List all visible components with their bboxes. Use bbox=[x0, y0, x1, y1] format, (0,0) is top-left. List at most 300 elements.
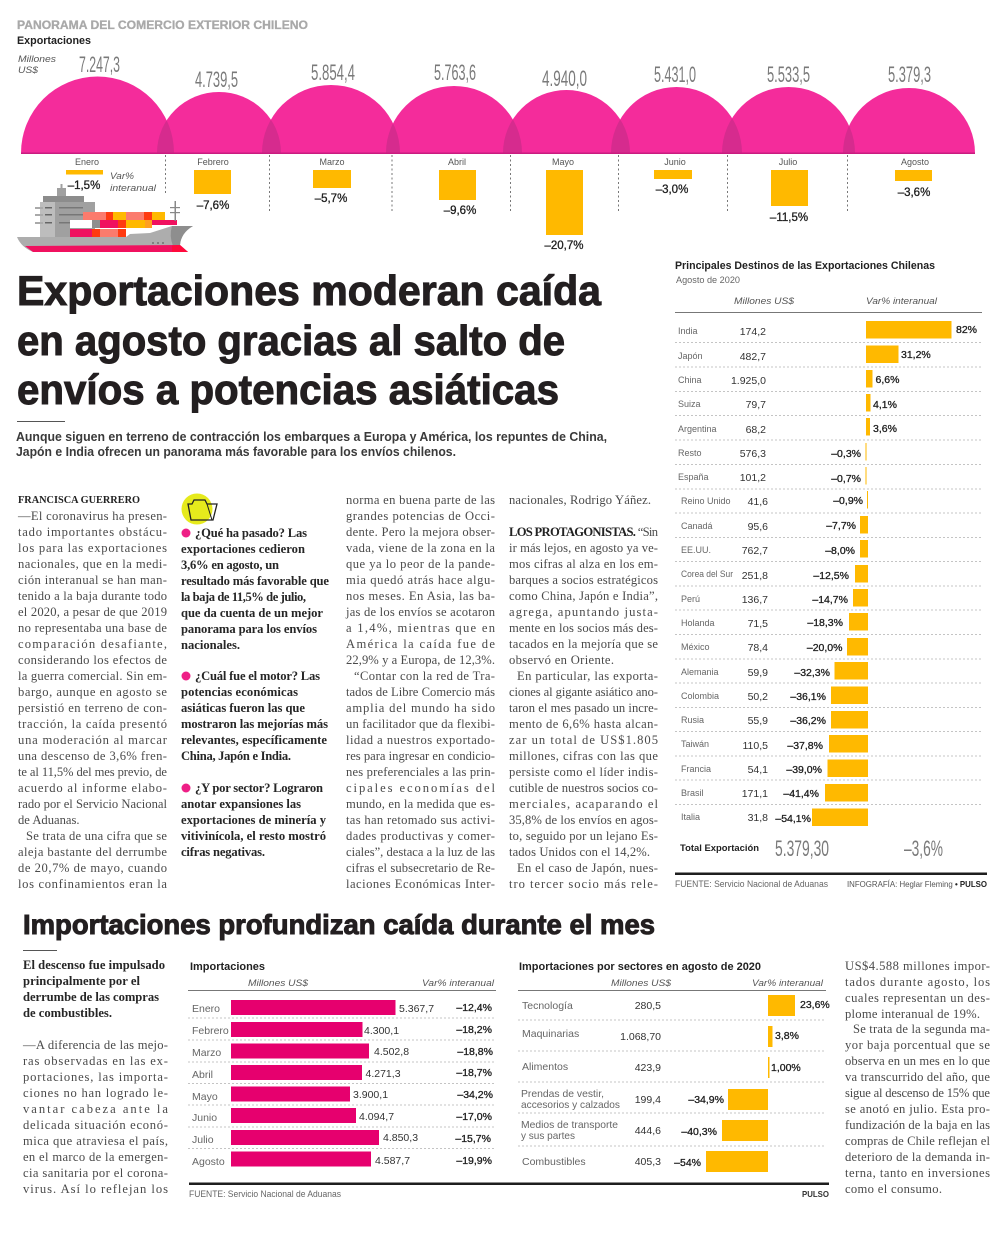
row: India bbox=[678, 321, 977, 338]
month: enero bbox=[66, 157, 103, 192]
row: Marzo: 4.502,8 bbox=[374, 1046, 409, 1058]
row: Julio: –15,7% bbox=[455, 1133, 491, 1145]
row: Alemania: Alemania bbox=[681, 667, 719, 677]
row: Alimentos: Alimentos bbox=[522, 1061, 568, 1073]
row: España: España bbox=[678, 472, 709, 482]
article column 1: una moderación al marcar bbox=[18, 733, 168, 747]
month: julio: Julio bbox=[779, 157, 797, 167]
row: Canadá bbox=[681, 516, 868, 534]
column headers bbox=[248, 978, 495, 989]
row: Julio: 4.850,3 bbox=[383, 1132, 418, 1144]
row: México: 78,4 bbox=[748, 642, 768, 654]
article: importaciones right: yor baja porcentual que se bbox=[845, 1038, 990, 1052]
article column 1: aleja bastante del derrumbe bbox=[18, 845, 167, 859]
dome values: 5.854,4 bbox=[311, 60, 355, 85]
row: Corea del Sur: –12,5% bbox=[813, 570, 849, 582]
row: Enero: –12,4% bbox=[456, 1002, 492, 1014]
row: Medios de transporte: Medios de transporte bbox=[521, 1119, 618, 1131]
article column 3: tas han retomado sus activi- bbox=[346, 813, 495, 827]
row: Maquinarias: 1.068,70 bbox=[620, 1031, 661, 1043]
article column 1: Se trata de una cifra que se bbox=[26, 829, 167, 843]
row: Japón: 31,2% bbox=[901, 349, 931, 361]
row: Italia bbox=[681, 808, 868, 826]
row: Colombia: Colombia bbox=[681, 691, 719, 701]
article column 1: te al 11,5% del mes previo, de bbox=[18, 765, 167, 779]
row: Maquinarias: 3,8% bbox=[775, 1030, 799, 1042]
article column 1: el 2020, a pesar de que 2019 bbox=[18, 605, 167, 619]
pulso credit: PULSO bbox=[802, 1189, 829, 1199]
row: Reino Unido: –0,9% bbox=[833, 495, 863, 507]
article column 1: tado importantes obstácu- bbox=[18, 525, 167, 539]
article: importaciones right: cuales representan un des- bbox=[845, 991, 990, 1005]
row: Medios de transporte: –40,3% bbox=[681, 1126, 717, 1138]
row: Tecnología: 280,5 bbox=[635, 1000, 661, 1012]
article column 4: En el caso de Japón, nues- bbox=[517, 861, 658, 875]
row: Febrero bbox=[192, 1022, 492, 1037]
article column 4: mente en los socios más des- bbox=[509, 621, 658, 635]
row: Medios de transporte: y sus partes bbox=[521, 1130, 575, 1142]
row: Prendas: 199,4 bbox=[635, 1094, 661, 1106]
infographic credit: INFOGRAFÍA: Heglar Fleming • PULSO bbox=[847, 879, 987, 889]
row: Colombia bbox=[681, 686, 868, 704]
row: Canadá: Canadá bbox=[681, 521, 713, 531]
row: España bbox=[678, 467, 866, 485]
question: y por sector: vitivinícola, el resto mostró bbox=[181, 829, 326, 843]
total row bbox=[680, 836, 943, 861]
row: Resto: Resto bbox=[678, 448, 702, 458]
row: Junio: 4.094,7 bbox=[359, 1111, 394, 1123]
dome shapes bbox=[21, 76, 975, 153]
article column 1: tenido a la baja durante todo bbox=[18, 589, 167, 603]
article: importaciones right: US$4.588 millones impor- bbox=[845, 959, 990, 973]
row: Reino Unido: 41,6 bbox=[748, 496, 768, 508]
row: Reino Unido: Reino Unido bbox=[681, 496, 731, 506]
dome chart: monthly exports bbox=[21, 52, 975, 154]
article column 3: 22,9% y a Europa, de 12,3%. bbox=[346, 653, 495, 667]
article: importaciones right bbox=[845, 959, 990, 1196]
row: Francia bbox=[681, 760, 868, 777]
row: China: China bbox=[678, 375, 702, 385]
article column 3: a 1,4%, mientras que en bbox=[346, 621, 496, 635]
row: EE.UU.: 762,7 bbox=[742, 545, 768, 557]
article column 1: nacionales, que en la medi- bbox=[18, 557, 167, 571]
row: México: México bbox=[681, 642, 710, 652]
section kicker: panorama del comercio exterior: PANORAMA DEL COMERCIO EXTERIOR CHILENO bbox=[17, 18, 308, 32]
main headline: Exportaciones moderan caída bbox=[17, 267, 602, 314]
month: julio: –11,5% bbox=[770, 212, 808, 224]
row: Japón: 482,7 bbox=[740, 351, 766, 363]
row: Reino Unido bbox=[681, 491, 868, 508]
article column 3: amplia del mundo ha sido bbox=[346, 701, 495, 715]
article column 3: laciones Económicas Inter- bbox=[346, 877, 495, 891]
article: importaciones right: como el consumo. bbox=[845, 1182, 942, 1196]
month: febrero bbox=[194, 157, 231, 212]
row: Maquinarias bbox=[522, 1026, 799, 1047]
month: febrero: –7,6% bbox=[197, 200, 229, 212]
row: Suiza: 4,1% bbox=[873, 399, 897, 411]
sidebar: key questions bbox=[181, 526, 329, 859]
article column 3: res para ingresar en condicio- bbox=[346, 749, 495, 763]
panel: principales destinos bbox=[675, 260, 987, 889]
article column 4: merciales, acaparando el bbox=[509, 797, 658, 811]
article column 4: to, seguido por un lejano Es- bbox=[509, 829, 658, 843]
month: mayo bbox=[544, 157, 584, 252]
month: marzo: –5,7% bbox=[315, 193, 347, 205]
row: Combustibles: Combustibles bbox=[522, 1156, 586, 1168]
article column 1: acuerdo al informe elabo- bbox=[18, 781, 167, 795]
dome values: 7.247,3 bbox=[79, 52, 120, 77]
article column 4: mos cifras al alza en los em- bbox=[509, 557, 658, 571]
row: Agosto: 4.587,7 bbox=[375, 1155, 410, 1167]
row: Febrero: –18,2% bbox=[456, 1024, 492, 1036]
month: enero: –1,5% bbox=[68, 180, 100, 192]
chart: monthly year-on-year change bbox=[66, 157, 932, 252]
month: julio bbox=[770, 157, 808, 224]
article column 1: una descenso de 3,6% fren- bbox=[18, 749, 167, 763]
question: cuál fue el motor: relevantes, específicamente bbox=[181, 733, 327, 747]
article: importaciones right: va transcurrido del año, que bbox=[845, 1070, 990, 1084]
question: y por sector: ¿Y por sector? Lograron bbox=[195, 781, 323, 795]
month dividers bbox=[166, 155, 848, 212]
row: Alimentos: 1,00% bbox=[771, 1062, 801, 1074]
row: Suiza: Suiza bbox=[678, 399, 701, 409]
row: India: 174,2 bbox=[740, 326, 766, 338]
question: qué ha pasado: panorama para los envíos bbox=[181, 622, 317, 636]
article: importaciones right: sigue al descenso de 15% que bbox=[845, 1086, 990, 1100]
article column 4: agrega, apuntando justa- bbox=[509, 605, 658, 619]
row: Taiwán: –37,8% bbox=[787, 740, 823, 752]
icon: folder on yellow circle bbox=[182, 494, 217, 524]
question: y por sector: anotar expansiones las bbox=[181, 797, 301, 811]
question: qué ha pasado: la baja de 11,5% de julio, bbox=[181, 590, 306, 604]
article column 1: FRANCISCA GUERRERO bbox=[18, 495, 140, 506]
row: Alimentos: 423,9 bbox=[635, 1062, 661, 1074]
row: Brasil: 171,1 bbox=[742, 788, 768, 800]
article column 1: considerando los efectos de bbox=[18, 653, 167, 667]
row: Febrero: Febrero bbox=[192, 1025, 229, 1037]
month: abril bbox=[439, 157, 476, 217]
article column 3: cipales economías del bbox=[346, 781, 496, 795]
article column 3: mia quedó atrás hace algu- bbox=[346, 573, 495, 587]
row: Tecnología bbox=[522, 995, 830, 1016]
article column 4: tro tercer socio más rele- bbox=[509, 877, 658, 891]
row: Rusia: Rusia bbox=[681, 715, 704, 725]
row: Agosto: Agosto bbox=[192, 1156, 225, 1168]
row: Perú bbox=[681, 589, 868, 606]
row: Francia: 54,1 bbox=[748, 764, 768, 776]
article column 1: ción interanual se han man- bbox=[18, 573, 167, 587]
question: qué ha pasado: 3,6% en agosto, un bbox=[181, 558, 279, 572]
main headline bbox=[17, 267, 602, 413]
row: México: –20,0% bbox=[807, 642, 842, 654]
article column 3: que ya lo peor de la pande- bbox=[346, 557, 495, 571]
row: Argentina: 3,6% bbox=[873, 423, 897, 435]
lead text: importaciones: derrumbe de las compras bbox=[23, 990, 159, 1004]
heading: exportaciones: Exportaciones bbox=[17, 35, 91, 47]
row: Holanda: –18,3% bbox=[807, 617, 843, 629]
month: junio: –3,0% bbox=[656, 184, 688, 196]
month: febrero: Febrero bbox=[197, 157, 229, 167]
article: importaciones right: terna, tanto en inversiones bbox=[845, 1166, 990, 1180]
row: Suiza bbox=[678, 394, 897, 412]
article: importaciones left: vantar cabeza ante la bbox=[23, 1102, 168, 1116]
row: China: 6,6% bbox=[876, 374, 899, 386]
row: China bbox=[678, 370, 899, 388]
article column 3: dades productivas y comer- bbox=[346, 829, 495, 843]
second headline: Importaciones profundizan caída durante el mes bbox=[23, 909, 655, 940]
row: Abril: Abril bbox=[192, 1069, 213, 1081]
row: Taiwán bbox=[681, 735, 868, 752]
row: Colombia: 50,2 bbox=[748, 691, 768, 703]
article column 1: rado por el Servicio Nacional bbox=[18, 797, 168, 811]
article column 3: mundo, en la medida que es- bbox=[346, 797, 495, 811]
article column 1: no representaba una base de bbox=[18, 621, 167, 635]
row: EE.UU.: –8,0% bbox=[825, 545, 855, 557]
article column 3: jas de los envíos se acotaron bbox=[345, 605, 496, 619]
main headline: envíos a potencias asiáticas bbox=[17, 366, 559, 413]
article column 3: dente. Pero la mejora obser- bbox=[346, 525, 495, 539]
article: importaciones right: compras de Chile reflejan el bbox=[845, 1134, 990, 1148]
month: agosto: Agosto bbox=[901, 157, 929, 167]
row: Perú: Perú bbox=[681, 594, 700, 604]
row: Corea del Sur: Corea del Sur bbox=[681, 569, 733, 579]
question: cuál fue el motor: asiáticas fueron las que bbox=[181, 701, 305, 715]
article: importaciones left: mica que atraviesa el país, bbox=[23, 1134, 168, 1148]
article: importaciones left: ras observadas en las ex- bbox=[23, 1054, 168, 1068]
row: Rusia bbox=[681, 711, 868, 728]
article column 4: 35,8% de los envíos en agos- bbox=[509, 813, 658, 827]
article: importaciones left: —A diferencia de las mejo- bbox=[22, 1038, 168, 1052]
lead text: importaciones: de combustibles. bbox=[23, 1006, 112, 1020]
article: importaciones left: delicada situación econó- bbox=[23, 1118, 168, 1132]
article: importaciones right: se anotó en julio. Esta pro- bbox=[845, 1102, 990, 1116]
question: cuál fue el motor: ¿Cuál fue el motor? Las bbox=[195, 669, 320, 683]
row: Agosto: –19,9% bbox=[456, 1155, 492, 1167]
article column 3: norma en buena parte de las bbox=[346, 493, 495, 507]
row: Suiza: 79,7 bbox=[746, 399, 766, 411]
row: Medios de transporte: 444,6 bbox=[635, 1125, 661, 1137]
question: cuál fue el motor: mostraron las mejorías más bbox=[181, 717, 328, 731]
article: importaciones left: en el marco de la emergen- bbox=[23, 1150, 168, 1164]
dome values bbox=[79, 52, 931, 92]
row: Enero: Enero bbox=[192, 1003, 220, 1015]
question: cuál fue el motor bbox=[181, 669, 328, 763]
row: Junio: Junio bbox=[192, 1112, 217, 1124]
article column 4: tacados en la mejoría que se bbox=[509, 637, 658, 651]
row: Tecnología: 23,6% bbox=[800, 999, 830, 1011]
row: Holanda: 71,5 bbox=[748, 618, 768, 630]
row: Argentina: 68,2 bbox=[746, 424, 766, 436]
question: qué ha pasado: nacionales. bbox=[181, 638, 240, 652]
article column 3: ciales”, destaca a la luz de las bbox=[346, 845, 495, 859]
article column 1: los para las exportaciones bbox=[18, 541, 167, 555]
article: importaciones left: cia sanitaria por el corona- bbox=[23, 1166, 168, 1180]
dome values: 5.533,5 bbox=[767, 62, 810, 87]
question: cuál fue el motor: potencias económicas bbox=[181, 685, 298, 699]
column headers: Millones US$ bbox=[248, 978, 309, 989]
row: Francia: –39,0% bbox=[786, 764, 822, 776]
question: qué ha pasado: resultado más favorable que bbox=[181, 574, 329, 588]
row: Rusia: 55,9 bbox=[748, 715, 768, 727]
row: Marzo bbox=[192, 1044, 493, 1059]
row: Marzo: –18,8% bbox=[457, 1046, 493, 1058]
row: Febrero: 4.300,1 bbox=[364, 1025, 399, 1037]
row: México bbox=[681, 638, 868, 656]
article column 1: tracción, la caída presentó bbox=[18, 717, 167, 731]
question: qué ha pasado: que da cuenta de un mejor bbox=[181, 606, 323, 620]
article column 3: cifras el subsecretario de Re- bbox=[346, 861, 495, 875]
row: Rusia: –36,2% bbox=[790, 715, 826, 727]
row: Francia: Francia bbox=[681, 764, 711, 774]
row: EE.UU. bbox=[681, 540, 868, 558]
row: España: –0,7% bbox=[831, 473, 861, 485]
article column 1: de Aduanas. bbox=[18, 813, 80, 827]
article: importaciones left: ciones no han logrado le- bbox=[23, 1086, 168, 1100]
month: junio: Junio bbox=[664, 157, 686, 167]
article column 4: tados Unidos con el 14,2%. bbox=[509, 845, 650, 859]
row: Colombia: –36,1% bbox=[790, 691, 826, 703]
article column 3 bbox=[345, 493, 496, 891]
article: importaciones left bbox=[22, 1038, 168, 1196]
article column 4: persiste como el líder indis- bbox=[509, 765, 658, 779]
article column 3: nes preferenciales a las prin- bbox=[346, 765, 495, 779]
question: y por sector bbox=[181, 781, 327, 859]
article column 4: observó en Oriente. bbox=[509, 653, 614, 667]
row: Alemania: –32,3% bbox=[794, 667, 830, 679]
legend: var% interanual bbox=[110, 171, 157, 194]
row: Julio bbox=[192, 1130, 491, 1146]
article column 3: grandes potencias de Occi- bbox=[346, 509, 495, 523]
row: Corea del Sur: 251,8 bbox=[742, 570, 768, 582]
article column 4: En particular, las exporta- bbox=[517, 669, 658, 683]
row: Alemania: 59,9 bbox=[748, 667, 768, 679]
row: Italia: 31,8 bbox=[748, 812, 768, 824]
month: abril: –9,6% bbox=[444, 205, 476, 217]
article: importaciones right: plome interanual de 19%. bbox=[845, 1007, 980, 1021]
article column 3: un facilitador que da flexibi- bbox=[346, 717, 495, 731]
row: Resto bbox=[678, 443, 866, 460]
row: Brasil: Brasil bbox=[681, 788, 704, 798]
lead text: importaciones bbox=[23, 958, 165, 1020]
row: Agosto bbox=[192, 1152, 492, 1168]
row: Perú: 136,7 bbox=[742, 594, 768, 606]
row: Argentina: Argentina bbox=[678, 424, 717, 434]
row: Junio: –17,0% bbox=[456, 1111, 492, 1123]
row: Italia: Italia bbox=[681, 812, 700, 822]
row: Prendas: –34,9% bbox=[688, 1094, 724, 1106]
article column 3: tados de Libre Comercio más bbox=[346, 685, 495, 699]
row: Mayo: Mayo bbox=[192, 1091, 218, 1103]
source credit: FUENTE: Servicio Nacional de Aduanas bbox=[675, 879, 828, 889]
month: enero: Enero bbox=[75, 157, 99, 167]
article: importaciones right: Se trata de la segunda ma- bbox=[853, 1022, 990, 1036]
total row: 5.379,30 bbox=[775, 836, 829, 861]
row: Junio bbox=[192, 1108, 492, 1124]
unit label: millones US$: US$ bbox=[18, 65, 39, 76]
article column 4: ir más lejos, en agosto ya ve- bbox=[509, 541, 658, 555]
row: Mayo: 3.900,1 bbox=[353, 1089, 388, 1101]
row: India: India bbox=[678, 326, 698, 336]
column headers: Var% interanual bbox=[422, 978, 495, 989]
month: marzo: Marzo bbox=[319, 157, 345, 167]
article column 4: nacionales, Rodrigo Yáñez. bbox=[509, 493, 651, 507]
row: China: 1.925,0 bbox=[731, 375, 766, 387]
article column 4: taron el mes pasado un incre- bbox=[509, 701, 658, 715]
row: Enero bbox=[192, 1000, 492, 1015]
row: Japón: Japón bbox=[678, 351, 703, 361]
row: Julio: Julio bbox=[192, 1134, 214, 1146]
chart: importaciones monthly bars bbox=[188, 961, 496, 1168]
row: Holanda bbox=[681, 613, 868, 630]
article column 1: bargo, aunque en agosto se bbox=[18, 685, 167, 699]
row: EE.UU.: EE.UU. bbox=[681, 545, 711, 555]
article column 4: barques a socios estratégicos bbox=[509, 573, 658, 587]
article column 1: persistió en terreno de con- bbox=[18, 701, 167, 715]
row: Resto: 576,3 bbox=[740, 448, 766, 460]
dome values: 5.763,6 bbox=[434, 60, 476, 85]
row: España: 101,2 bbox=[740, 472, 766, 484]
row: Prendas: Prendas de vestir, bbox=[521, 1088, 604, 1100]
month: mayo: –20,7% bbox=[544, 240, 584, 252]
row: Canadá: 95,6 bbox=[748, 521, 768, 533]
column headers: Var% interanual bbox=[752, 978, 824, 989]
month: agosto bbox=[895, 157, 932, 199]
unit label: millones US$ bbox=[18, 54, 56, 76]
column headers bbox=[611, 978, 824, 989]
article column 4: mento de 6,6% hasta alcan- bbox=[509, 717, 658, 731]
row: Tecnología: Tecnología bbox=[522, 1000, 573, 1012]
dome overlaps bbox=[157, 118, 855, 152]
row: Mayo bbox=[192, 1086, 493, 1103]
chart heading: Importaciones bbox=[190, 961, 265, 973]
row: Taiwán: Taiwán bbox=[681, 739, 709, 749]
panel heading: Principales Destinos de las Exportaciones Chilenas bbox=[675, 260, 935, 272]
lead text: importaciones: El descenso fue impulsado bbox=[23, 958, 165, 972]
subheading bbox=[16, 430, 607, 459]
chart: importaciones por sectores bbox=[518, 961, 830, 1172]
column headers: Millones US$ bbox=[611, 978, 672, 989]
column headers bbox=[734, 296, 938, 307]
unit label: millones US$: Millones bbox=[18, 54, 56, 65]
article column 1: de 20,7% de mayo, cuando bbox=[18, 861, 167, 875]
article: importaciones left: virus. Así lo reflejan los bbox=[23, 1182, 168, 1196]
question: y por sector: cifras negativas. bbox=[181, 845, 265, 859]
row: Resto: –0,3% bbox=[831, 448, 861, 460]
article column 3: “Contar con la red de Tra- bbox=[354, 669, 495, 683]
month: mayo: Mayo bbox=[552, 157, 574, 167]
row: Marzo: Marzo bbox=[192, 1047, 221, 1059]
legend: var% interanual: Var% bbox=[110, 171, 135, 182]
article column 1: los confinamientos eran la bbox=[18, 877, 167, 891]
row: India: 82% bbox=[956, 324, 977, 336]
question: cuál fue el motor: China, Japón e India. bbox=[181, 749, 291, 763]
month: abril: Abril bbox=[448, 157, 466, 167]
month: marzo bbox=[313, 157, 351, 205]
dome values: 4.739,5 bbox=[195, 67, 238, 92]
row: Combustibles bbox=[522, 1151, 768, 1172]
article column 1 bbox=[17, 495, 168, 891]
row: Alimentos bbox=[522, 1057, 801, 1078]
row: Prendas bbox=[521, 1088, 768, 1111]
panel date: Agosto de 2020 bbox=[676, 275, 740, 285]
main headline: en agosto gracias al salto de bbox=[17, 317, 565, 364]
icon: container ship bbox=[17, 184, 193, 252]
article: importaciones right: deterioro de la demanda in- bbox=[845, 1150, 990, 1164]
article column 3: nos meses. En Asia, las ba- bbox=[346, 589, 495, 603]
row: Brasil bbox=[681, 784, 868, 802]
row: Italia: –54,1% bbox=[775, 813, 811, 825]
row: Combustibles: 405,3 bbox=[635, 1156, 661, 1168]
